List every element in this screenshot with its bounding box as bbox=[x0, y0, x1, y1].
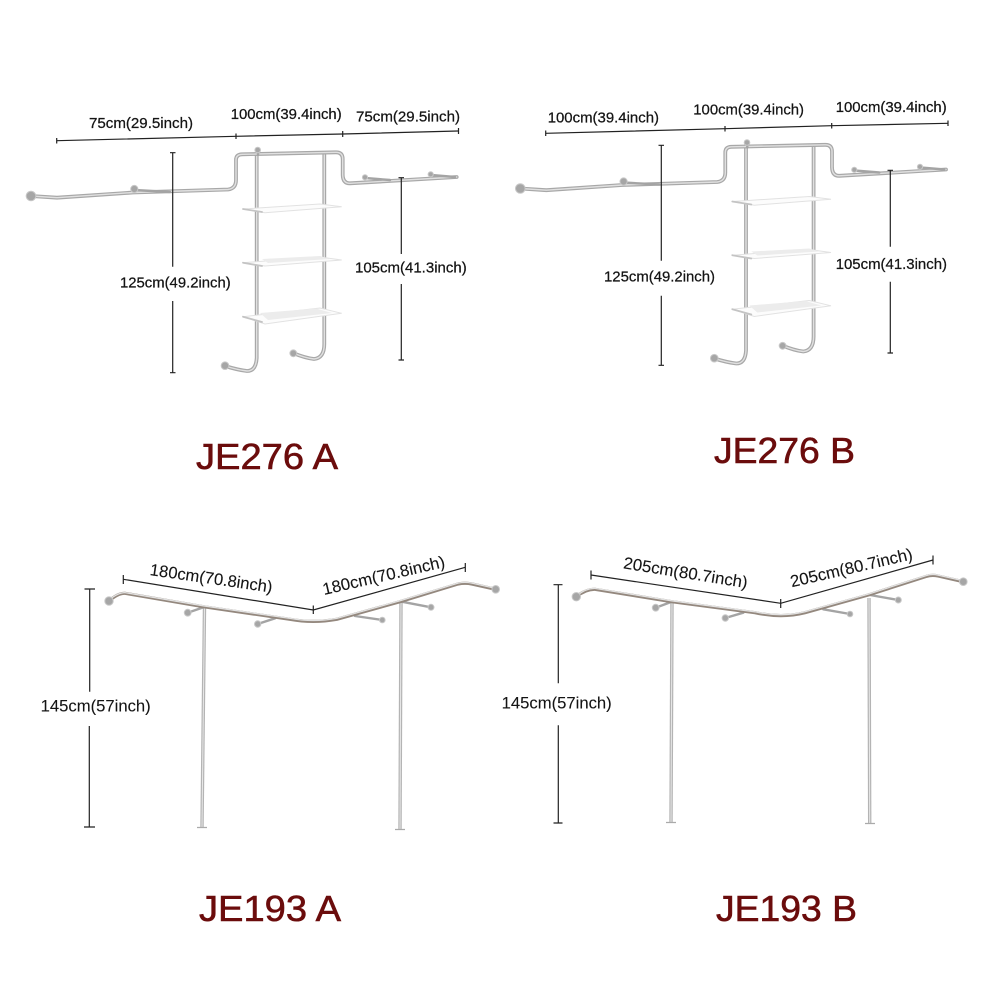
dimension labels: JE276 A: 75cm(29.5inch) bbox=[89, 115, 193, 132]
rack: JE193 A corner rail bbox=[105, 582, 500, 830]
heading: JE193 B: JE193 B bbox=[716, 888, 857, 929]
rack: JE276 A wall rail with shelves bbox=[26, 147, 457, 371]
dimension labels: JE193 B bbox=[502, 545, 914, 712]
dimension labels: JE276 B: 125cm(49.2inch) bbox=[604, 268, 715, 285]
dimension labels: JE276 A: 105cm(41.3inch) bbox=[355, 260, 467, 277]
dimension labels: JE193 B: 205cm(80.7inch) bbox=[788, 545, 914, 591]
rack: JE276 B wall rail with shelves bbox=[516, 140, 946, 364]
dimension labels: JE193 B: 145cm(57inch) bbox=[502, 693, 612, 712]
dimension lines: JE193 A bbox=[84, 563, 465, 827]
panel: JE276 B bbox=[516, 99, 948, 471]
dimension labels: JE276 A bbox=[89, 106, 467, 292]
heading: JE193 A: JE193 A bbox=[199, 888, 342, 929]
dimension labels: JE276 A: 100cm(39.4inch) bbox=[231, 106, 342, 123]
panel: JE193 A bbox=[41, 552, 500, 929]
dimension labels: JE193 A: 180cm(70.8inch) bbox=[321, 552, 447, 599]
dimension labels: JE276 B: 105cm(41.3inch) bbox=[836, 256, 947, 273]
dimension lines: JE193 B bbox=[554, 556, 933, 823]
dimension lines: JE276 A bbox=[57, 128, 458, 373]
dimension labels: JE276 B: 100cm(39.4inch) bbox=[836, 99, 947, 116]
panel: JE276 A bbox=[26, 106, 467, 477]
dimension labels: JE276 B bbox=[548, 99, 947, 285]
panel: JE193 B bbox=[502, 545, 967, 929]
dimension labels: JE276 B: 100cm(39.4inch) bbox=[548, 109, 659, 126]
dimension labels: JE276 B: 100cm(39.4inch) bbox=[693, 102, 804, 119]
dimension labels: JE276 A: 125cm(49.2inch) bbox=[120, 275, 231, 292]
heading: JE276 A: JE276 A bbox=[196, 436, 339, 477]
dimension lines: JE276 B bbox=[546, 120, 948, 365]
rack: JE193 B corner rail bbox=[572, 574, 967, 824]
dimension labels: JE276 A: 75cm(29.5inch) bbox=[356, 109, 460, 126]
dimension labels: JE193 A: 145cm(57inch) bbox=[41, 696, 151, 715]
dimension labels: JE193 A bbox=[41, 552, 447, 715]
heading: JE276 B: JE276 B bbox=[714, 430, 855, 471]
dimension labels: JE193 A: 180cm(70.8inch) bbox=[149, 560, 274, 597]
dimension labels: JE193 B: 205cm(80.7inch) bbox=[622, 553, 749, 592]
